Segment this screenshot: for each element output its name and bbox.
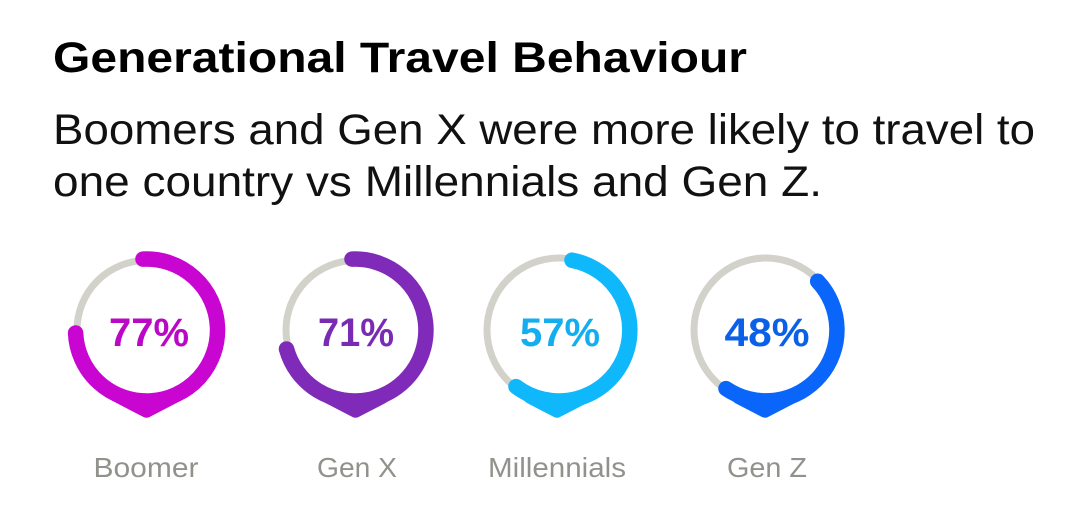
panel: Gen X xyxy=(286,259,426,483)
subtitle xyxy=(53,106,1035,206)
panel: Boomer xyxy=(76,259,218,483)
donut arc: Millennials 57% xyxy=(513,260,630,418)
label: Gen X: Gen X xyxy=(317,452,397,483)
label: Gen Z: Gen Z xyxy=(727,452,807,483)
value: 71%: 71% xyxy=(318,311,394,355)
subtitle: one country vs Millennials and Gen Z. xyxy=(53,158,822,206)
panel: Gen Z xyxy=(694,258,838,483)
panel: Millennials xyxy=(487,258,631,483)
donut arc: Boomer 77% xyxy=(76,259,218,418)
label: Millennials: Millennials xyxy=(488,452,626,483)
title: Generational Travel Behaviour xyxy=(53,34,747,82)
value: 57%: 57% xyxy=(520,311,600,355)
subtitle: Boomers and Gen X were more likely to travel to xyxy=(53,106,1035,154)
donut arc: Gen Z 48% xyxy=(722,281,837,418)
value: 77%: 77% xyxy=(109,311,189,355)
value: 48%: 48% xyxy=(724,311,810,355)
donut arc: Gen X 71% xyxy=(286,259,426,418)
label: Boomer: Boomer xyxy=(94,452,198,483)
